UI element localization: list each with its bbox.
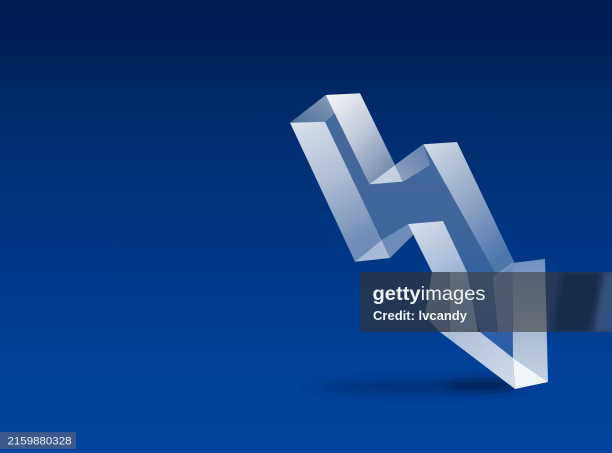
- band right reflections: [552, 272, 612, 332]
- arrow central dark body: [325, 95, 513, 358]
- first stem front face: [290, 122, 382, 262]
- lower slant face: [382, 224, 414, 258]
- ground shadow: [315, 379, 525, 394]
- arrow tip highlight: [513, 358, 548, 389]
- lower notch triangle: [355, 240, 390, 262]
- getty images logo text: gettyimages: [372, 283, 486, 305]
- band left dark shade: [360, 272, 450, 332]
- credit text: Credit: lvcandy: [373, 309, 467, 323]
- arrow head face: [512, 259, 548, 382]
- glass arrow: [290, 93, 548, 389]
- image id number: 2159880328: [8, 436, 72, 448]
- upper notch triangle: [369, 165, 403, 184]
- first stem inner face: [326, 93, 395, 184]
- arrow head inner wing: [493, 263, 512, 332]
- second stem face: [423, 142, 515, 276]
- image id tag: [0, 432, 76, 449]
- lower wing strip: [440, 332, 515, 389]
- watermark band: [360, 272, 612, 332]
- lower stem face: [408, 221, 478, 332]
- upper slant face: [395, 144, 430, 182]
- first stem top face: [290, 95, 335, 123]
